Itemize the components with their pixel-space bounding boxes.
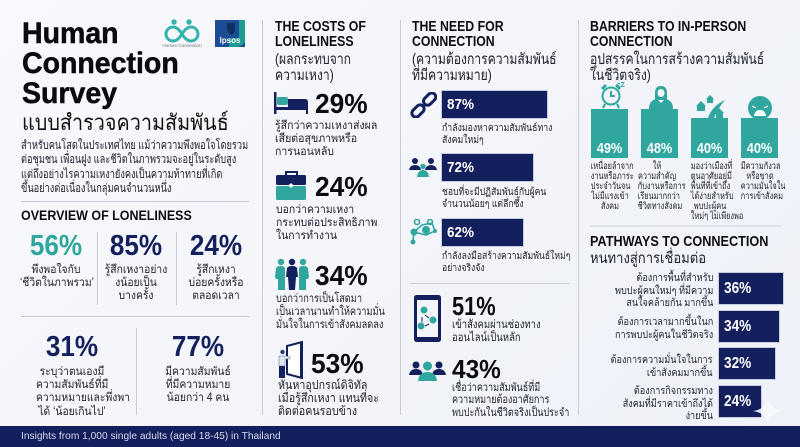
caption: pathway 36%: พบปะผู้คนใหม่ๆ ที่มีความ (615, 285, 713, 297)
stat: 24%: บ่อยครั้งหรือ (189, 277, 243, 289)
logo: Ipsos (215, 20, 245, 47)
bar: 62% (441, 218, 524, 247)
bar: 32% (718, 347, 776, 380)
caption: pathway 24%: สังคมที่มีราคาเข้าถึงได้ (623, 398, 713, 410)
bar: 87% (441, 90, 548, 119)
subheading: barriers (590, 50, 764, 84)
bar: 87%: 87% (447, 96, 474, 112)
caption: 43%: เชื่อว่าความสัมพันธ์ที่มี (452, 382, 540, 394)
caption: 87% (442, 122, 552, 146)
caption: 48%: ความสำคัญ (638, 171, 676, 182)
bar: 34%: 34% (724, 318, 751, 334)
intro paragraph: ขึ้นอย่างต่อเนื่องในกลุ่มคนจำนวนหนึ่ง (21, 181, 171, 195)
stat: 77%: มีความสัมพันธ์ (165, 366, 231, 378)
caption: pathway 24%: ต้องการกิจกรรมทาง (634, 385, 713, 397)
caption: 87%: กำลังมองหาความสัมพันธ์ทาง (442, 123, 552, 134)
bar: 34% (718, 310, 780, 343)
icon: community (409, 362, 446, 381)
footer text: Insights from 1,000 single adults (aged 18-45) in Thailand (21, 430, 281, 442)
stat: 31%: ความสัมพันธ์ที่มี (36, 379, 108, 391)
subheading: barriers: อุปสรรคในการสร้างความสัมพันธ์ (590, 51, 764, 68)
caption: 24% (276, 204, 377, 242)
caption: pathway 34%: ต้องการเวลามากขึ้นในก (617, 316, 713, 328)
caption: 40% anxious: ความมั่นใจใน (741, 181, 785, 192)
caption: 40% anxious: การเข้าสังคม (741, 191, 783, 202)
stat: 24%: ตลอดเวลา (192, 290, 240, 302)
intro paragraph: แต่ถึงอย่างไรความเหงายังคงเป็นความท้าทายที่เกิด (21, 167, 222, 181)
caption: pathway 24% (623, 385, 713, 423)
subheading: barriers: ในชีวิตจริง) (590, 66, 651, 84)
heading: the costs of loneliness: LONELINESS (275, 33, 354, 50)
bar: 72%: 72% (447, 158, 474, 176)
intro paragraph: สำหรับคนโสดในประเทศไทย แม้ว่าความพึงพอใจโดยรวม (21, 138, 248, 152)
caption: 62%: กำลังลงมือสร้างความสัมพันธ์ใหม่ๆ (442, 251, 570, 262)
caption: pathway 32%: ต้องการความมั่นใจในการ (611, 354, 713, 366)
stat: 53%: 53% (311, 348, 364, 379)
subheading: need (412, 51, 557, 84)
heading: the costs of loneliness (275, 18, 366, 50)
icon: alarm clock (601, 82, 626, 108)
caption: 40% (690, 159, 743, 222)
caption: 40% anxious: มีความกังวล (741, 161, 780, 172)
heading: the need for connection: CONNECTION (412, 33, 495, 50)
heading: pathways: PATHWAYS TO CONNECTION (590, 233, 768, 250)
icon: alarm clock: zZ (617, 82, 626, 89)
heading: the costs of loneliness: THE COSTS OF (275, 18, 366, 35)
logo: Ipsos: Ipsos (220, 36, 241, 45)
icon: sad face (748, 96, 772, 118)
Thai subtitle: แบบสำรวจความสัมพันธ์ (22, 110, 229, 135)
stat: 24% (188, 230, 243, 302)
caption: 24%: ในการทำงาน (276, 230, 337, 242)
caption: 29%: การนอนหลับ (275, 146, 334, 158)
caption: 48% (638, 160, 686, 212)
stat: 31% (36, 331, 130, 418)
stat: 56% (20, 230, 94, 289)
caption: 40%: พบปะผู้คน (694, 201, 726, 212)
caption: 49%: สังคม (601, 201, 619, 212)
title: Human (22, 17, 119, 50)
stat: 85% (105, 230, 167, 302)
bar: 49%: 49% (597, 141, 622, 157)
caption: 29% (275, 120, 377, 158)
bar: 48% (641, 109, 678, 158)
bar: 49% (591, 109, 628, 158)
stat: 85%: งน้อยเป็น (115, 277, 157, 289)
icon: network (410, 219, 437, 244)
bar: 72% (441, 153, 534, 182)
caption: 49%: เหนื่อยล้าจาก (591, 161, 634, 172)
caption: 34%: เป็นเวลานานทำให้ความมั่น (276, 306, 385, 318)
bar: 40% anxious (741, 118, 778, 158)
caption: pathway 36%: ต้องการพื้นที่สำหรับ (636, 272, 713, 284)
subheading: costs: ความเหงา) (275, 66, 334, 84)
caption: 40%: ได้ง่ายสำหรับ (691, 191, 734, 202)
subheading: need: ที่มีความหมาย) (412, 66, 492, 84)
caption: 62%: อย่างจริงจัง (442, 263, 485, 274)
caption: 53% (278, 378, 379, 418)
caption: 49% (590, 159, 634, 212)
bar: 32%: 32% (724, 354, 751, 372)
caption: 24%: กระทบต่อประสิทธิภาพ (276, 217, 377, 229)
bar: 24%: 24% (724, 392, 751, 410)
caption: 48%: ชีวิตทางสังคม (638, 201, 682, 212)
caption: 40%: ใหม่ๆ ไม่เพียงพอ (691, 211, 743, 222)
intro paragraph (21, 138, 248, 196)
caption: 62% (442, 250, 570, 274)
caption: 72% (442, 184, 546, 210)
bar: 48%: 48% (647, 141, 672, 157)
icon: woman (649, 86, 673, 109)
caption: pathway 32%: เข้าสังคมมากขึ้น (647, 367, 713, 379)
icon: three people (275, 258, 309, 290)
icon: briefcase (276, 171, 306, 200)
stat: 77% (165, 331, 231, 404)
caption: 49%: ประจำวันจน (591, 181, 630, 192)
caption: 40% anxious (741, 162, 779, 202)
icon: phone (414, 295, 441, 342)
heading: barriers: CONNECTION (590, 33, 673, 50)
icon: chain (410, 92, 437, 118)
title: Survey (22, 77, 117, 110)
caption: 72%: จำนวนน้อยๆ แต่ลึกซึ้ง (442, 199, 524, 210)
caption: 43% (452, 380, 569, 419)
caption: pathway 34% (615, 316, 713, 341)
caption: 40%: พื้นที่ที่เข้าถึง (691, 181, 730, 192)
caption: pathway 24%: ง่ายขึ้น (686, 410, 713, 422)
stat: 31%: ความหมายและพึ่งพา (36, 392, 130, 404)
heading: barriers: BARRIERS TO IN-PERSON (590, 18, 746, 35)
stat: 24%: 24% (315, 171, 368, 202)
stat: 31%: 31% (46, 331, 98, 363)
icon: bed (274, 92, 308, 114)
footer band (0, 426, 800, 447)
logo: Human Connection (162, 19, 202, 48)
title (22, 17, 179, 110)
caption: 29%: รู้สึกว่าความเหงาส่งผล (275, 120, 377, 132)
stat: 29%: 29% (315, 88, 368, 119)
stat: 31%: ได้ ‘น้อยเกินไป’ (38, 406, 106, 418)
stat: 56%: ‘ชีวิตในภาพรวม’ (20, 277, 94, 289)
caption: 53%: เมื่อรู้สึกเหงา แทนที่จะ (278, 391, 379, 405)
stat: 85%: บางครั้ง (119, 290, 153, 302)
caption: 40%: มองว่าเมืองที่ (691, 161, 732, 172)
caption: 43%: ความหมายต้องอาศัยการ (452, 394, 549, 406)
caption: 43%: พบปะกันในชีวิตจริงเป็นประจำ (452, 407, 569, 419)
caption: 49%: ไม่มีแรงเข้า (591, 191, 629, 202)
stat: 77%: 77% (172, 331, 224, 363)
caption: 40% anxious: หรือขาด (746, 171, 774, 182)
caption: 34%: บอกว่าการเป็นโสดมา (276, 293, 362, 305)
subheading: need: (ความต้องการความสัมพันธ์ (412, 51, 557, 68)
heading: overview of loneliness: OVERVIEW OF LONELINESS (21, 207, 192, 223)
caption: 49%: งานหรือภาระ (591, 171, 634, 182)
caption: pathway 36%: สนใจคล้ายกัน มากขึ้น (626, 297, 713, 309)
caption: pathway 34%: การพบปะผู้คนในชีวิตจริง (615, 329, 713, 341)
stat: 77%: น้อยกว่า 4 คน (167, 392, 229, 404)
caption: 51% (452, 318, 541, 344)
caption: 53%: หันหาอุปกรณ์ดิจิทัล (278, 378, 367, 392)
stat: 43%: 43% (452, 354, 501, 384)
intro paragraph: ต่อชุมชน เพื่อนฝูง และชีวิตในภาพรวมจะอยู่ในระดับสูง (21, 152, 236, 166)
icon: person with tablet (278, 341, 303, 379)
heading: the need for connection: THE NEED FOR (412, 18, 504, 35)
caption: 40%: ตนอาศัยอยู่มี (691, 171, 732, 182)
stat: 85%: รู้สึกเหงาอย่าง (105, 264, 167, 276)
caption: 34%: มั่นใจในการเข้าสังคมลดลง (276, 319, 383, 331)
stat: 56%: 56% (30, 230, 82, 262)
stat: 85%: 85% (110, 230, 162, 262)
stat: 24%: รู้สึกเหงา (196, 264, 236, 276)
heading: barriers (590, 18, 746, 50)
stat: 34%: 34% (315, 260, 368, 291)
stat: 51%: 51% (452, 291, 496, 321)
icon: houses (696, 95, 725, 118)
bar: 40%: 40% (697, 141, 722, 157)
caption: 87%: สังคมใหม่ๆ (442, 135, 484, 146)
stat: 77%: ที่มีความหมาย (166, 379, 230, 391)
icon: group (409, 158, 437, 177)
bar: 36% (718, 272, 784, 305)
subheading: costs: (ผลกระทบจาก (275, 51, 351, 68)
caption: 48%: กับงานหรือการ (638, 181, 686, 192)
bar: 40% anxious: 40% (747, 141, 772, 157)
stat: 24%: 24% (190, 230, 242, 262)
caption: 29%: เสียต่อสุขภาพหรือ (275, 133, 357, 145)
bar: 62%: 62% (447, 224, 474, 240)
logo: Human Connection: Human Connection (162, 43, 202, 48)
caption: 51%: ออนไลน์เป็นหลัก (452, 331, 521, 344)
caption: 53%: ติดต่อคนรอบข้าง (278, 404, 357, 418)
caption: 34% (276, 290, 385, 331)
bar: 36%: 36% (724, 280, 751, 296)
bar: 40% (691, 118, 728, 158)
subheading: costs (275, 51, 351, 84)
caption: 48%: ให้ (653, 161, 661, 172)
caption: 51%: เข้าสังคมผ่านช่องทาง (452, 318, 541, 331)
title: Connection (22, 47, 179, 80)
heading: the need for connection (412, 18, 504, 50)
caption: 24%: บอกว่าความเหงา (276, 204, 354, 216)
caption: pathway 32% (611, 354, 713, 379)
bar: 24% (718, 385, 762, 418)
caption: 72%: ชอบที่จะมีปฏิสัมพันธ์กับผู้คน (442, 187, 546, 198)
subheading: pathways: หนทางสู่การเชื่อมต่อ (590, 250, 706, 267)
stat: 31%: ระบุว่าตนเองมี (40, 366, 104, 378)
stat: 56%: พึงพอใจกับ (32, 264, 80, 276)
icon: sparkle (753, 396, 783, 426)
caption: pathway 36% (615, 272, 713, 310)
caption: 48%: เรียนมากกว่า (638, 191, 680, 202)
